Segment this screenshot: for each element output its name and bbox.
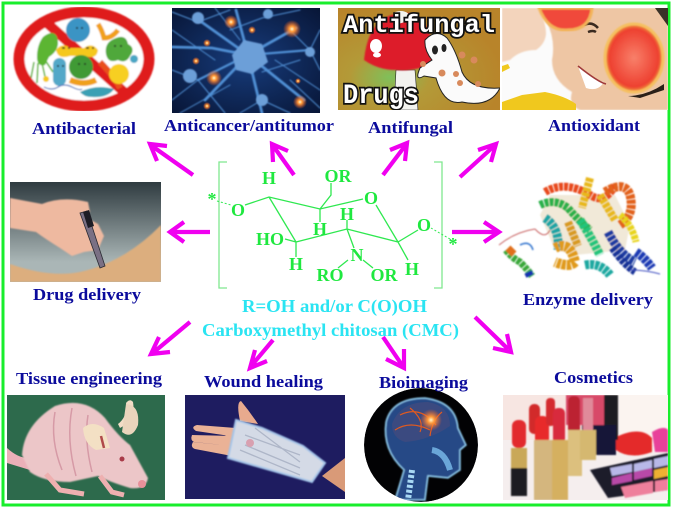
atom labels — [208, 166, 458, 285]
image: woman with grapefruit — [502, 8, 668, 110]
atom labels: H — [340, 204, 354, 224]
label: Tissue engineering: Tissue engineering — [16, 369, 163, 388]
atom labels: HO — [256, 229, 284, 249]
brackets — [219, 162, 442, 288]
arrows: magenta pointers from the molecule — [150, 143, 511, 368]
arrow to wound healing — [250, 340, 273, 368]
arrow to antioxidant — [460, 144, 496, 177]
image: antifungal drugs cartoon — [338, 8, 500, 112]
label: Antifungal: Antifungal — [368, 118, 453, 137]
atom labels: H — [289, 254, 303, 274]
image: neurons — [172, 8, 320, 113]
image: drug delivery pen on arm — [10, 182, 161, 282]
bonds — [245, 183, 418, 268]
image: nude rat — [7, 395, 165, 500]
arrow to enzyme delivery — [452, 222, 499, 242]
label: Cosmetics: Cosmetics — [554, 368, 633, 387]
image: bandaged wrist — [185, 395, 345, 499]
atom labels: * — [208, 189, 216, 209]
arrow to drug delivery — [170, 222, 210, 242]
dotted glycosidic bonds — [217, 201, 450, 239]
label: Drug delivery: Drug delivery — [33, 285, 142, 304]
atom labels: O — [417, 215, 431, 235]
image: antifungal drugs cartoon: Drugs — [343, 81, 419, 112]
atom labels: O — [231, 200, 245, 220]
arrow to antifungal — [383, 143, 407, 175]
label: Antibacterial: Antibacterial — [32, 119, 136, 138]
image: lipsticks and make-up palette — [503, 395, 668, 500]
image: protein enzyme ribbon — [499, 178, 660, 276]
arrow to tissue engineering — [151, 322, 190, 354]
label: Anticancer/antitumor: Anticancer/antitumor — [164, 116, 334, 135]
atom labels: N — [350, 245, 364, 265]
atom labels: H — [262, 168, 276, 188]
label: Bioimaging: Bioimaging — [379, 373, 469, 392]
atom labels: H — [313, 219, 327, 239]
atom labels: H — [405, 259, 419, 279]
chemical structure of CMC — [208, 162, 458, 288]
atom labels: OR — [324, 166, 353, 186]
label: Antioxidant: Antioxidant — [548, 116, 640, 135]
image: antibacterial no-germs sign — [19, 12, 149, 106]
arrow to antibacterial — [150, 144, 193, 175]
label: Enzyme delivery: Enzyme delivery — [523, 290, 654, 309]
atom labels: OR — [370, 265, 399, 285]
arrow to cosmetics — [475, 317, 511, 352]
atom labels: O — [364, 188, 378, 208]
arrow to bioimaging — [383, 337, 404, 368]
caption: compound name: Carboxymethyl chitosan (CMC) — [202, 320, 459, 341]
atom labels: * — [448, 234, 458, 254]
caption: R groups: R=OH and/or C(O)OH — [242, 296, 427, 317]
image: brain scan in circle — [364, 388, 478, 502]
image: antifungal drugs cartoon: Antifungal — [343, 11, 495, 40]
label: Wound healing: Wound healing — [204, 372, 324, 391]
arrow to anticancer — [272, 144, 294, 175]
atom labels: RO — [316, 265, 344, 285]
